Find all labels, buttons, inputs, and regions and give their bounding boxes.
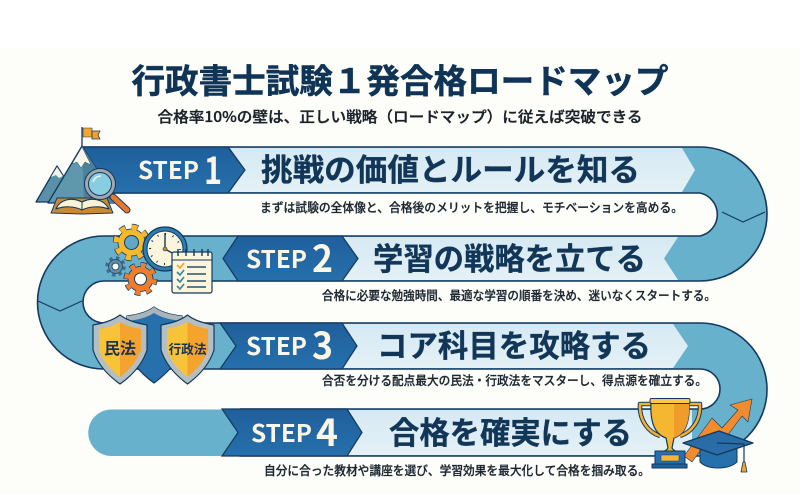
road seam left: [38, 301, 82, 311]
step 4 label: STEP: [251, 414, 312, 449]
step 2 heading: 学習の戦略を立てる: [373, 242, 646, 277]
icon: mountain, book and magnifier: [36, 127, 127, 214]
icon: big mountain: [48, 146, 118, 203]
step 4 description: 自分に合った教材や講座を選び、学習効果を最大化して合格を掴み取る。: [264, 463, 650, 478]
step 3 light band: [342, 324, 688, 368]
icon: right shield 行政法: 行政法: [168, 342, 206, 357]
icon: yellow gear: [116, 227, 147, 258]
step 3 heading: コア科目を攻略する: [377, 329, 651, 364]
icon: checklist: [172, 249, 212, 293]
step 4 light band: [348, 410, 692, 455]
icon: flag: [82, 127, 100, 146]
panel: step 2: [223, 229, 678, 283]
step 1 description: まずは試験の全体像と、合格後のメリットを把握し、モチベーションを高める。: [260, 200, 683, 215]
icon: open book: [51, 198, 113, 214]
panel: step 3: [220, 316, 688, 370]
icon: left shield 民法: 民法: [104, 339, 136, 358]
icon: law shields: [93, 307, 214, 384]
icon: graduation cap: [683, 431, 753, 472]
icon: orange gear: [126, 265, 154, 293]
icon: clock: [143, 227, 187, 271]
step 3 blue badge: [220, 323, 357, 369]
step 1 number: 1: [204, 141, 222, 195]
step 1 heading: 挑戦の価値とルールを知る: [261, 153, 640, 188]
title: 行政書士試験１発合格ロードマップ: [132, 64, 668, 101]
subtitle: 合格率10%の壁は、正しい戦略（ロードマップ）に従えば突破できる: [158, 106, 642, 127]
step 2 description: 合格に必要な勉強時間、最適な学習の順番を決め、迷いなくスタートする。: [322, 288, 716, 303]
step 4 heading: 合格を確実にする: [389, 416, 632, 451]
icon: small grey gear: [107, 258, 124, 275]
step 1 blue badge: [83, 147, 245, 193]
winding road ribbon: [38, 147, 767, 456]
icon: small mountain: [36, 166, 80, 202]
icon: rising arrow: [684, 399, 752, 462]
step 3 label: STEP: [246, 327, 307, 362]
road seam right: [722, 212, 765, 222]
icon: trophy: [640, 398, 700, 468]
step 1 light band: [230, 148, 695, 192]
panel: step 4: [222, 403, 692, 457]
road start pill: [88, 410, 240, 456]
step 4 number: 4: [316, 403, 338, 457]
icon: magnifier: [84, 168, 127, 210]
panel: step 1: [83, 141, 695, 195]
step 3 number: 3: [312, 316, 333, 370]
icon: trophy, arrow and graduation cap: [640, 398, 753, 472]
icon: gears, clock and checklist: [107, 227, 212, 293]
step 4 blue badge: [222, 409, 362, 456]
step 3 description: 合否を分ける配点最大の民法・行政法をマスターし、得点源を確立する。: [322, 373, 707, 388]
step 2 blue badge: [223, 236, 358, 281]
step 2 label: STEP: [246, 240, 307, 275]
step 2 number: 2: [312, 229, 333, 283]
step 2 light band: [342, 237, 678, 280]
step 1 label: STEP: [138, 151, 199, 186]
icon: centre shield: [127, 307, 182, 383]
